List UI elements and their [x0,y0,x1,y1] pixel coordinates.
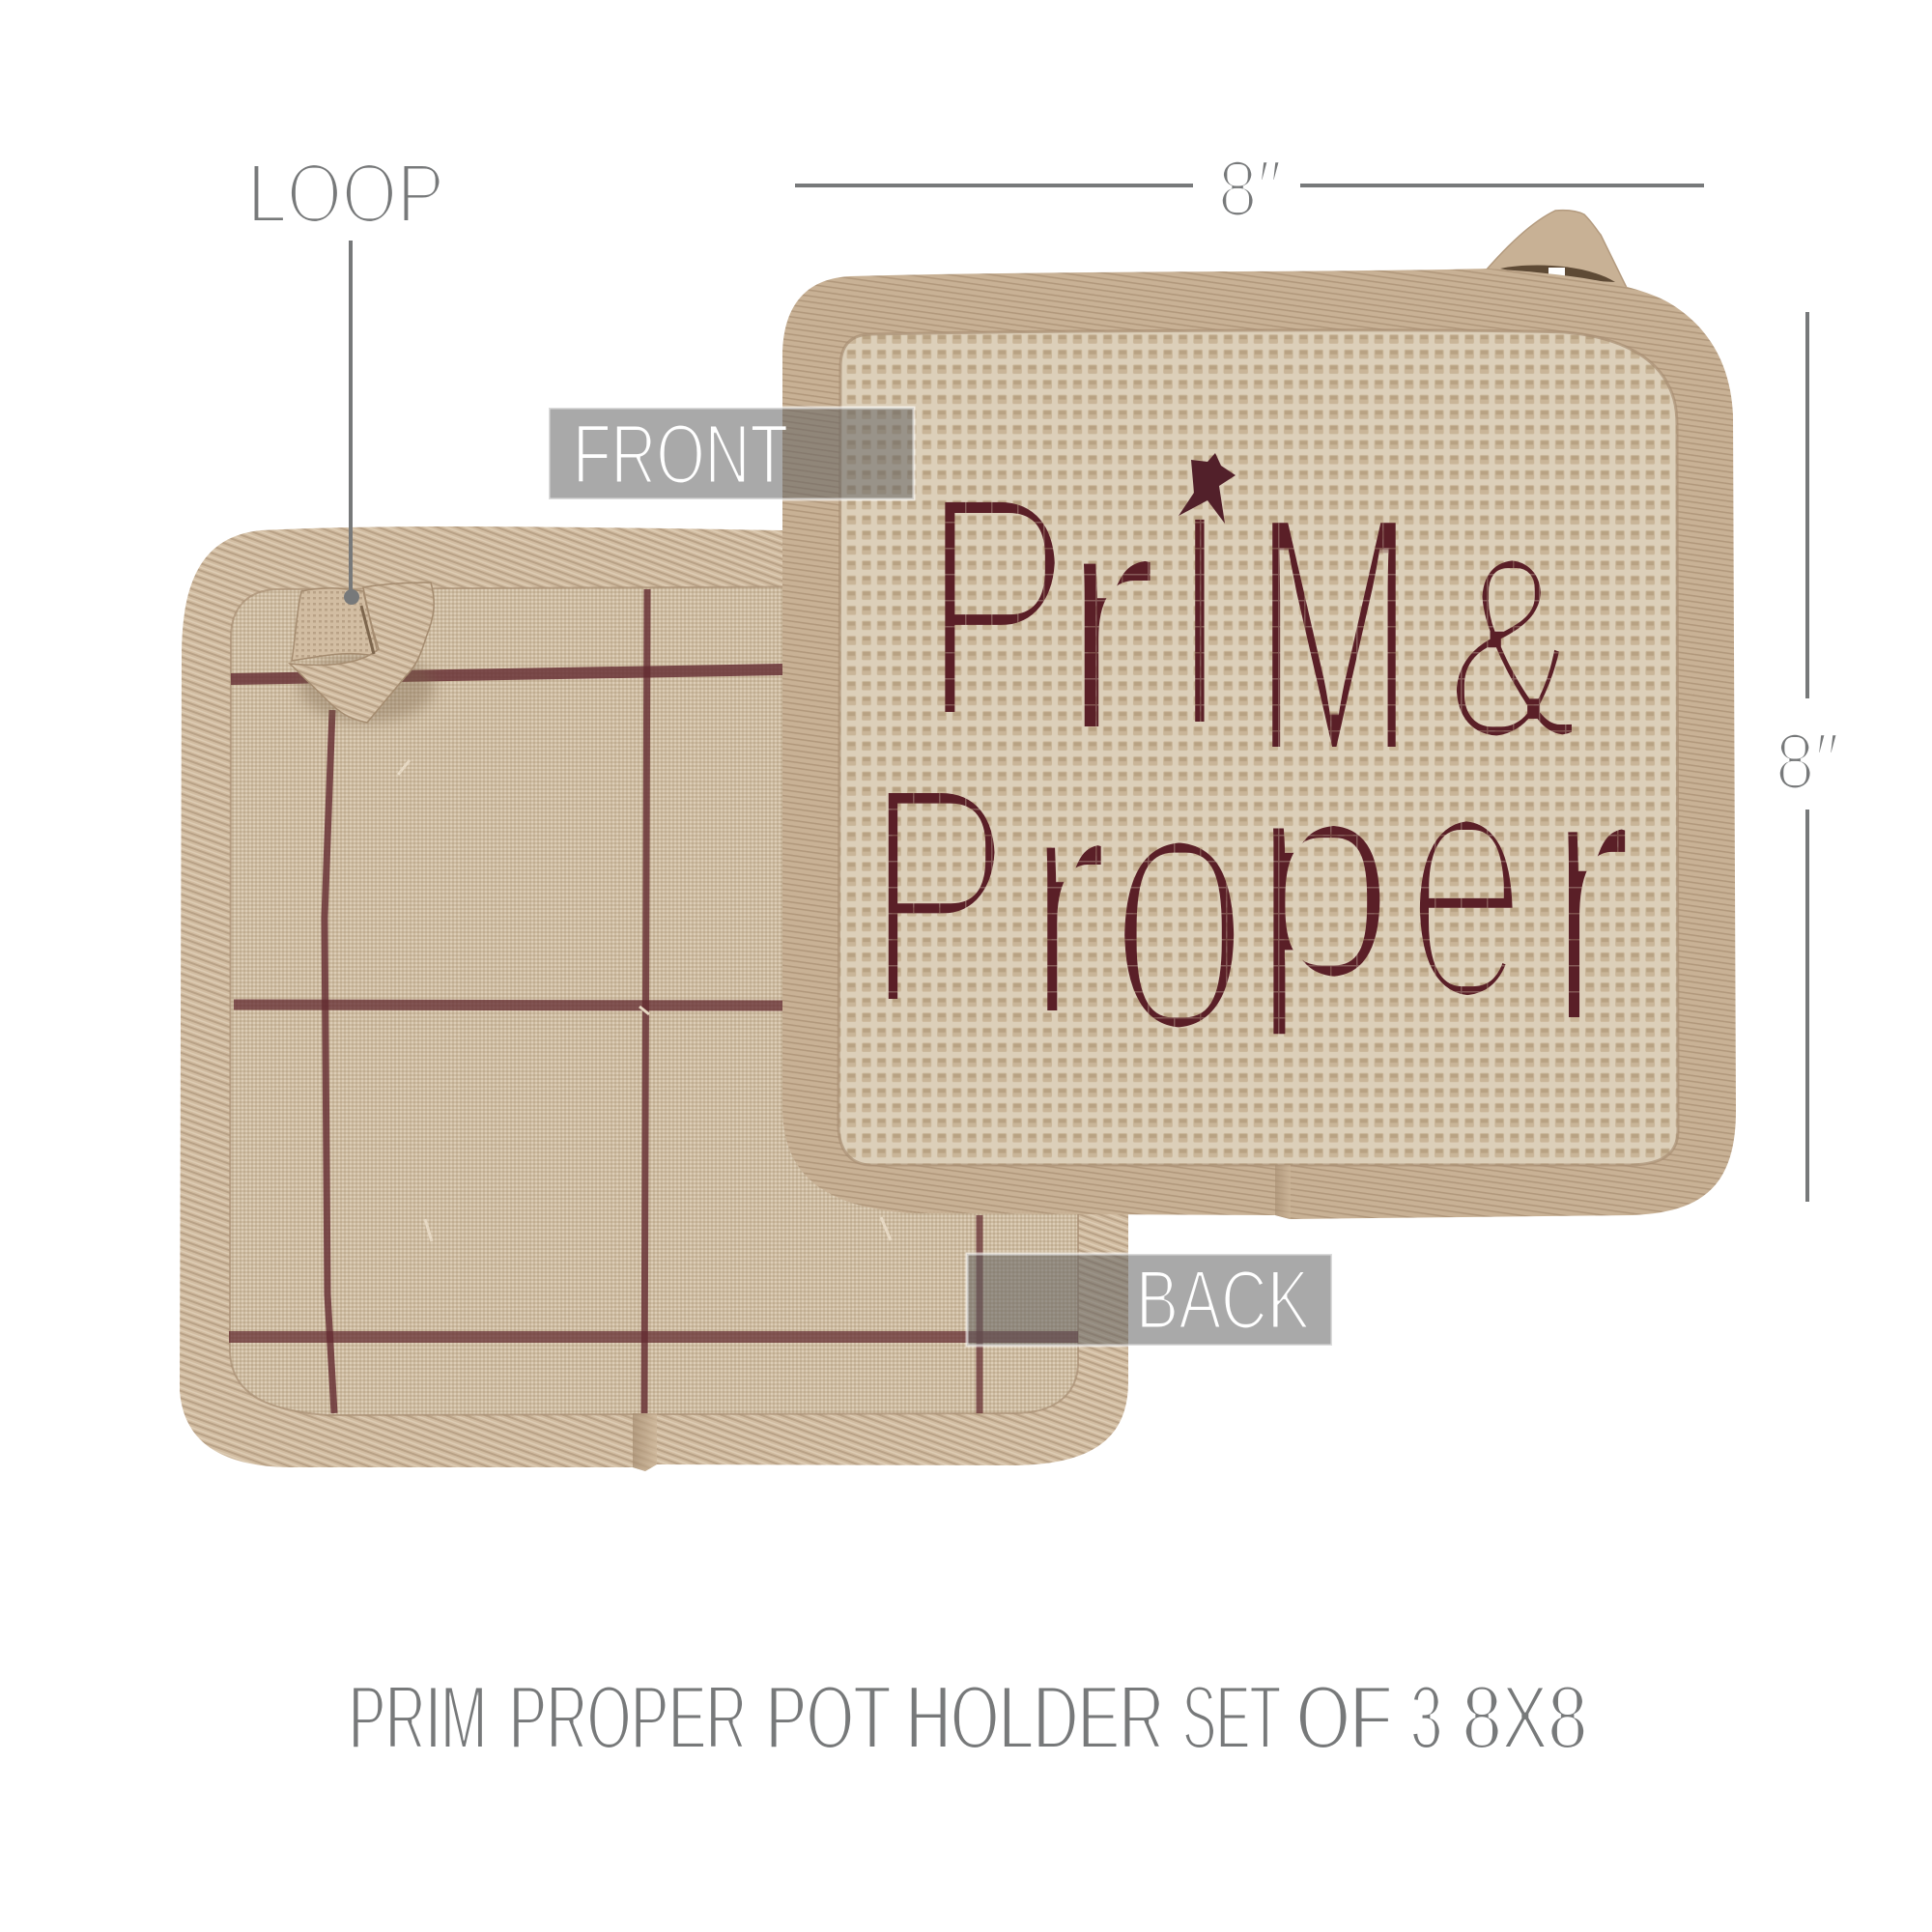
line: Prim &: M [1252,451,1416,818]
title: 3 [1410,1666,1442,1768]
back plaid lines [229,589,1078,1413]
line: Prim & [945,502,1572,747]
line: Prim &: r [1055,441,1163,797]
front bottom seam [1275,1165,1291,1219]
title [349,1666,1587,1768]
line: Prim &: & [1445,502,1579,793]
line: Proper: p [1250,715,1397,1041]
icon: front hanging loop [1486,211,1627,288]
back bottom seam [633,1413,657,1471]
infographic canvas [180,162,1835,1747]
panel: back pot holder [180,526,1128,1471]
line: Proper: r [1021,725,1113,1082]
panel: front pot holder [782,211,1736,1219]
dimension: width 8 inches: 8″ [1218,145,1282,233]
callout: FRONT label: FRONT [573,408,788,501]
title: 8X8 [1463,1666,1587,1768]
line: Proper: r [1542,695,1637,1097]
line: Proper: P [865,719,1012,1074]
title: SET [1182,1666,1280,1768]
dimension: height 8 inches: 8″ [1776,718,1839,806]
back fabric [230,585,1078,1415]
line: Prim &: P [921,425,1072,788]
title: POT [766,1666,890,1768]
back binding [180,526,1128,1471]
title: PRIM [349,1666,487,1768]
callout: BACK label [967,1254,1332,1347]
line: Proper: o [1108,702,1250,1108]
callout: BACK label: BACK [1136,1254,1310,1347]
fabric tacks [398,760,891,1241]
line: Prim &: I [1186,456,1213,783]
front binding [782,269,1736,1219]
callout: LOOP label with leader: LOOP [247,147,444,241]
callout: LOOP label with leader [247,147,444,605]
line: Proper: e [1405,690,1528,1072]
icon: back hanging loop [290,582,435,723]
title: PROPER [509,1666,747,1768]
front waffle panel [838,330,1678,1165]
line: Proper [865,690,1637,1108]
embroidered lettering [889,502,1625,1034]
icon: star [1179,453,1236,524]
title: HOLDER [906,1666,1164,1768]
title: OF [1296,1666,1392,1768]
